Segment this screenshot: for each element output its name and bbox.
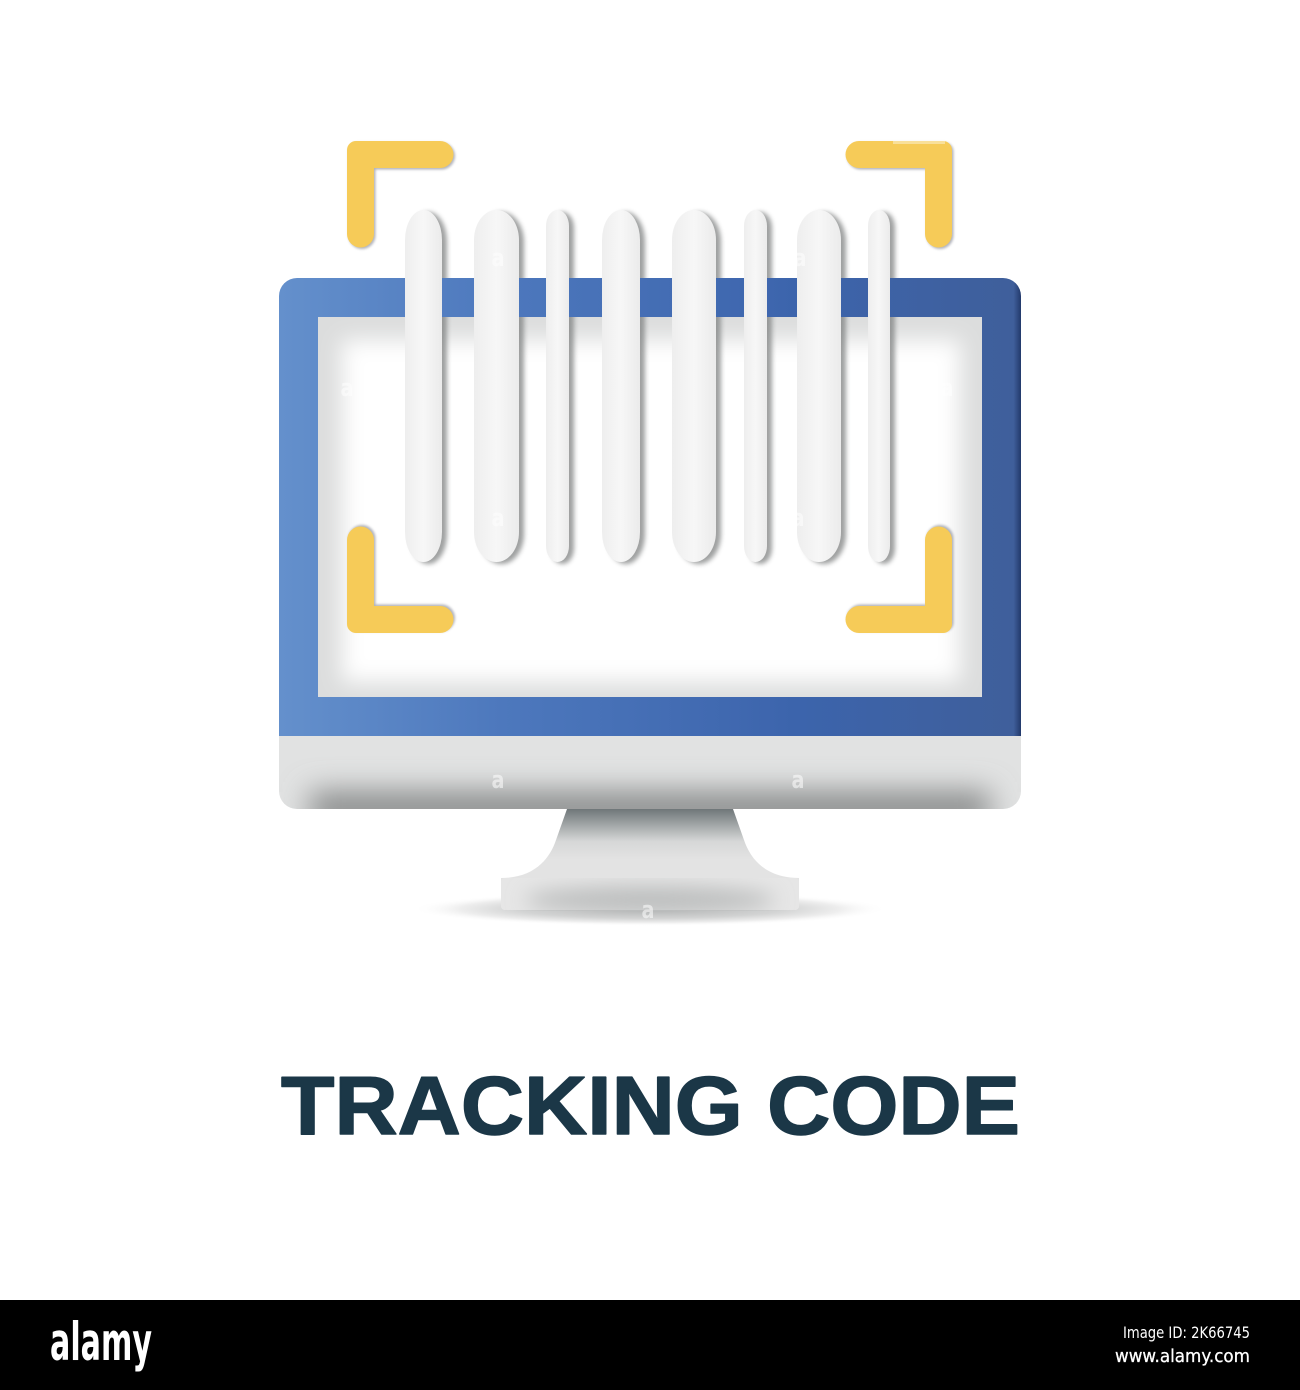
watermark marks: a	[642, 896, 654, 924]
barcode bar 1	[405, 210, 442, 562]
monitor bezel	[279, 278, 1021, 740]
floor shadow	[412, 892, 888, 926]
monitor chin	[279, 736, 1021, 809]
watermark marks: a	[940, 374, 954, 402]
alamy logo: alamy	[50, 1312, 152, 1373]
watermark marks	[340, 244, 954, 924]
watermark marks: a	[492, 504, 504, 532]
barcode bar 7	[797, 210, 841, 562]
watermark marks: a	[794, 244, 806, 272]
barcode bar 6	[744, 210, 767, 562]
bracket: top left	[347, 141, 455, 249]
bracket: bottom left	[347, 525, 455, 633]
monitor screen	[318, 317, 982, 697]
bracket: bottom right	[846, 525, 954, 633]
barcode bar 3	[546, 210, 569, 562]
watermark marks: a	[792, 504, 804, 532]
barcode	[405, 210, 895, 564]
title: TRACKING CODE	[281, 1059, 1020, 1152]
barcode bar 5	[672, 210, 716, 562]
barcode bar 2	[474, 210, 519, 562]
barcode bar 4	[602, 210, 640, 562]
footer bar	[0, 1300, 1300, 1390]
barcode bar shadows	[410, 212, 895, 564]
website: www.alamy.com	[1115, 1346, 1250, 1367]
scan brackets	[347, 141, 954, 633]
watermark marks: a	[340, 374, 354, 402]
icon: computer monitor	[279, 141, 1021, 926]
watermark marks: a	[792, 766, 804, 794]
watermark marks: a	[492, 766, 504, 794]
barcode bar 8	[868, 210, 890, 562]
image id: Image ID: 2K66745	[1123, 1323, 1250, 1342]
watermark marks: a	[492, 244, 504, 272]
bracket: top right	[846, 141, 954, 249]
monitor stand	[501, 809, 799, 914]
